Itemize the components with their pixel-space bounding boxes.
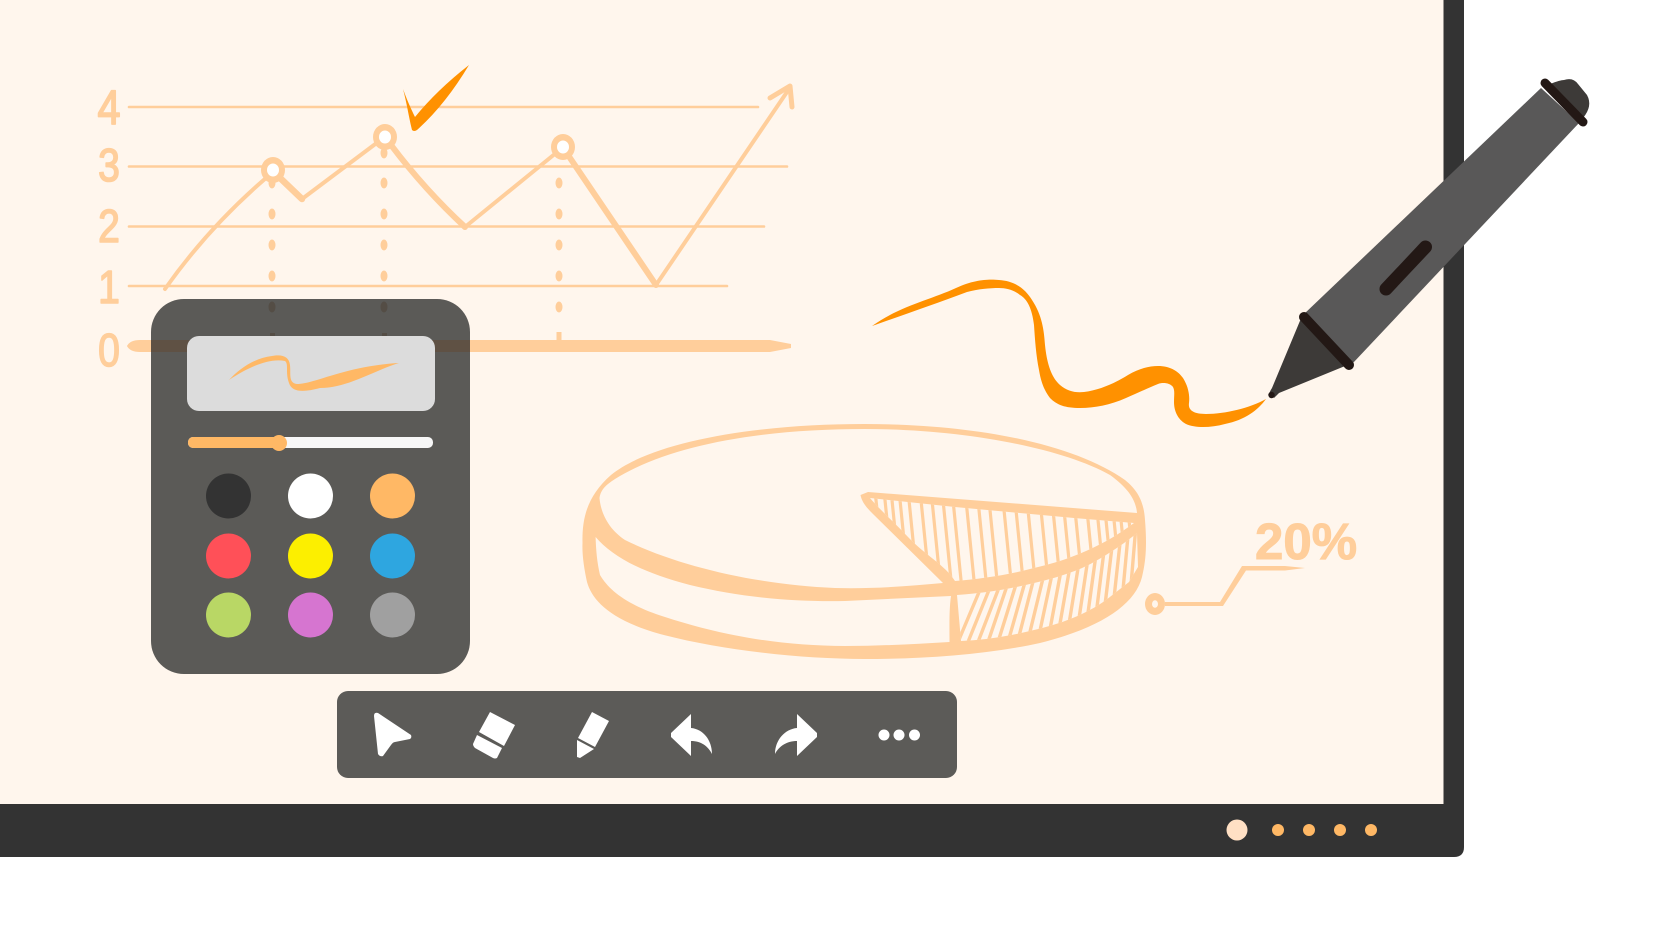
- size slider: [188, 435, 433, 451]
- pen body: [1303, 88, 1579, 363]
- baseline axis: [127, 340, 791, 352]
- callout: 20% label with leader: [1145, 513, 1357, 615]
- axis labels: 2: [98, 201, 120, 253]
- pie chart sketch: [582, 424, 1146, 659]
- icon: pencil: [577, 712, 609, 758]
- icon: redo: [775, 714, 817, 756]
- axis labels: [97, 80, 121, 377]
- axis labels: 0: [98, 325, 120, 377]
- preview stroke: [229, 355, 399, 391]
- toolbar: [337, 691, 957, 778]
- preview screen: [187, 336, 435, 411]
- screen: [0, 0, 1444, 804]
- icon: eraser: [473, 712, 515, 758]
- axis labels: 1: [98, 262, 120, 314]
- pen tip: [1269, 316, 1350, 398]
- line chart: [97, 80, 792, 377]
- data line: [165, 86, 792, 289]
- leader line: [1165, 566, 1305, 606]
- chart elements seen through panel: [151, 302, 470, 352]
- panel: pen settings: [151, 299, 470, 674]
- wedge hatching: [870, 498, 1134, 581]
- pen cap: [1550, 79, 1589, 118]
- axis labels: 4: [97, 80, 121, 135]
- pen bands: [1304, 83, 1583, 365]
- percent value: 20%: [1255, 513, 1357, 570]
- data points: [261, 124, 575, 183]
- icon: stylus pen: [1268, 79, 1589, 398]
- dotted drop lines: [268, 148, 562, 342]
- grid lines: [129, 107, 787, 286]
- colour swatches: [206, 474, 415, 638]
- icon: more: [878, 730, 920, 740]
- orange pen stroke: [872, 280, 1266, 427]
- disc outline: [582, 424, 1146, 659]
- icon: cursor: [374, 713, 411, 756]
- side hatching: [957, 533, 1138, 641]
- pen nib: [1268, 392, 1275, 398]
- icon: orange check mark: [403, 65, 469, 131]
- monitor indicator lights: [1226, 820, 1377, 840]
- icon: undo: [671, 714, 712, 756]
- axis labels: 3: [98, 140, 120, 192]
